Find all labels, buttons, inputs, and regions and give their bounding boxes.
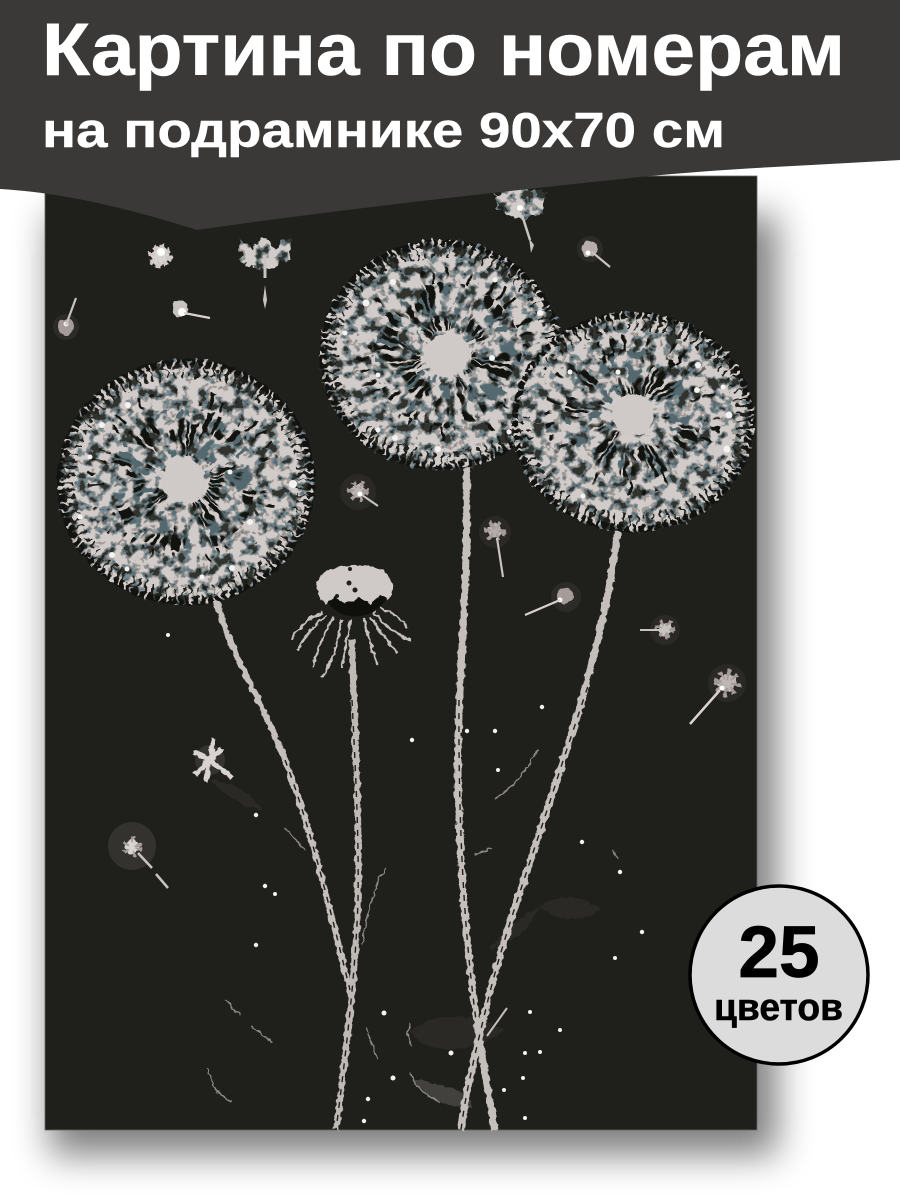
badge circle (690, 886, 868, 1064)
stem: bud (336, 640, 358, 1130)
bud dome (316, 565, 393, 605)
faint background details (210, 780, 600, 1108)
outline (60, 362, 312, 602)
blue shading (587, 371, 679, 459)
seed 7 (340, 474, 378, 510)
seed 5 (494, 188, 547, 253)
seed 4 (172, 301, 210, 318)
canvas shadow (50, 215, 777, 1155)
fluff (326, 246, 556, 464)
seed 10 (640, 615, 680, 645)
dandelion: center (323, 243, 559, 467)
bud strands (291, 608, 412, 678)
seed 9 (525, 582, 581, 615)
bud dark spots (335, 567, 358, 598)
stem: left dandelion (215, 595, 352, 1000)
seed 1 (151, 247, 169, 265)
seed 8 (479, 516, 511, 577)
stem dark flecks (285, 650, 600, 1130)
dark streaks (96, 396, 272, 564)
stem: center dandelion (458, 462, 495, 1130)
paint speck dots (166, 633, 644, 1123)
title: Картина по номерам (42, 8, 845, 91)
seed 3 (53, 298, 79, 340)
stem fork twig (487, 1008, 507, 1036)
blue shading (397, 307, 497, 403)
wispy light strokes (207, 750, 618, 1102)
bud head (291, 565, 412, 678)
core (605, 392, 665, 440)
outline (323, 243, 559, 467)
badge label: цветов (714, 987, 843, 1029)
floating seeds (53, 188, 746, 888)
seed 2 (238, 236, 292, 309)
seed 11 (690, 664, 746, 724)
canvas painting background (45, 176, 757, 1130)
core (415, 333, 475, 390)
sparkles (568, 362, 732, 498)
seed 13 (108, 822, 168, 888)
core (155, 459, 215, 510)
dark streaks (553, 343, 713, 487)
sparkles (78, 402, 297, 580)
stem: right dandelion (461, 528, 618, 1130)
outline (515, 315, 751, 529)
badge number: 25 (738, 912, 820, 993)
sparkles (342, 278, 543, 452)
fluff (64, 366, 308, 598)
subtitle: на подрамнике 90х70 см (42, 104, 725, 158)
seed 12 (193, 738, 232, 782)
dandelion: right (515, 315, 751, 529)
blue shading (134, 432, 234, 528)
dark streaks (363, 275, 531, 435)
seed 6 (577, 236, 610, 267)
dandelion: left (60, 362, 312, 602)
bud shadow (322, 590, 392, 617)
badge: 25 colours (690, 886, 868, 1064)
fluff (518, 318, 748, 526)
header banner (0, 0, 900, 230)
